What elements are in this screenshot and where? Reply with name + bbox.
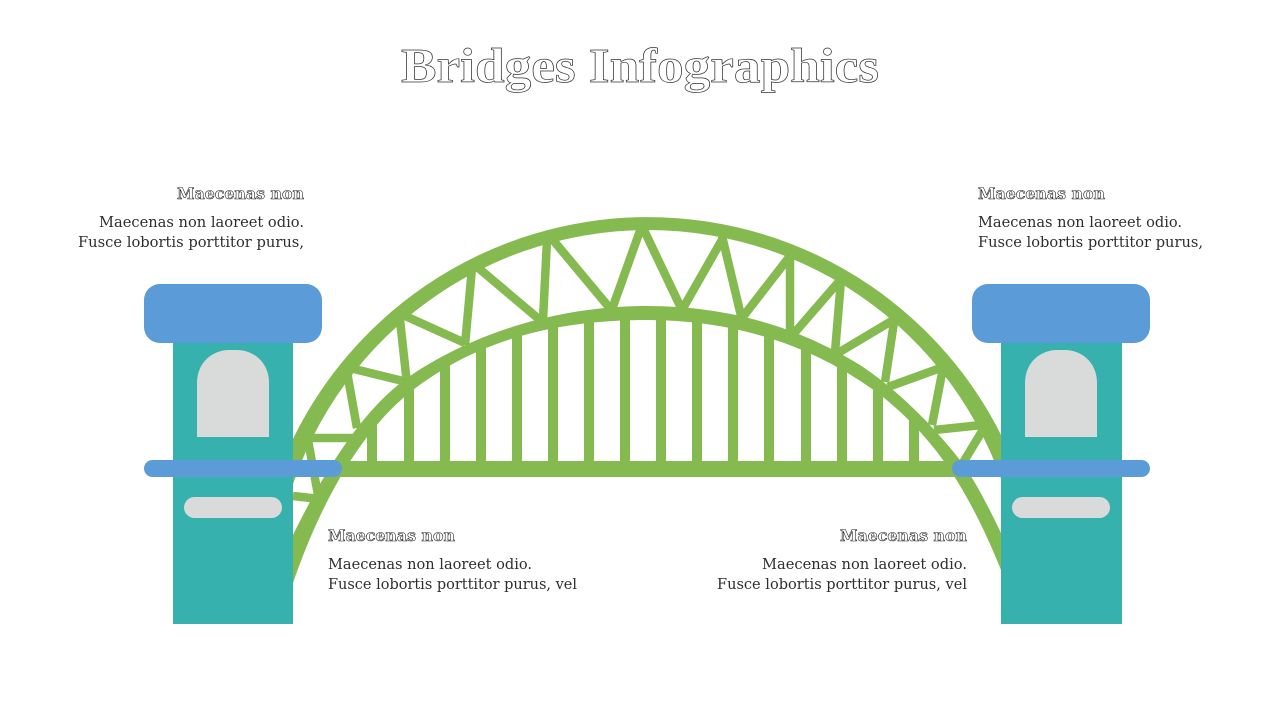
text block: bottom right: Fusce lobortis porttitor purus, vel <box>717 577 967 593</box>
text block: top right: Maecenas non <box>978 184 1105 203</box>
text block: top right: Maecenas non laoreet odio. <box>978 215 1182 231</box>
arched window <box>197 350 269 437</box>
text block: bottom left <box>328 526 577 593</box>
outer arch <box>281 217 1015 528</box>
tower body <box>173 340 293 624</box>
bridge illustration <box>144 217 1150 624</box>
text block: top right <box>978 184 1203 251</box>
text block: bottom right <box>717 526 967 593</box>
text block: bottom right: Maecenas non laoreet odio. <box>762 557 967 573</box>
arched window <box>1025 350 1097 437</box>
text block: bottom left: Maecenas non <box>328 526 455 545</box>
tower body <box>1001 340 1122 624</box>
title: Bridges Infographics <box>401 38 879 93</box>
text block: top left <box>78 184 304 251</box>
tower cap <box>144 284 322 343</box>
blue rail <box>144 460 342 477</box>
deck <box>293 461 1001 477</box>
right tower <box>952 284 1150 624</box>
text block: bottom left: Maecenas non laoreet odio. <box>328 557 532 573</box>
text block: top left: Maecenas non laoreet odio. <box>99 215 304 231</box>
truss struts <box>293 228 984 499</box>
hangers <box>367 313 919 464</box>
text block: bottom right: Maecenas non <box>840 526 967 545</box>
pill slot <box>1012 497 1110 518</box>
text block: top right: Fusce lobortis porttitor purus, <box>978 235 1203 251</box>
inner arch <box>293 306 1001 583</box>
text block: bottom left: Fusce lobortis porttitor purus, vel <box>328 577 577 593</box>
text block: top left: Maecenas non <box>177 184 304 203</box>
left tower <box>144 284 342 624</box>
pill slot <box>184 497 282 518</box>
text block: top left: Fusce lobortis porttitor purus, <box>78 235 304 251</box>
tower cap <box>972 284 1150 343</box>
blue rail <box>952 460 1150 477</box>
